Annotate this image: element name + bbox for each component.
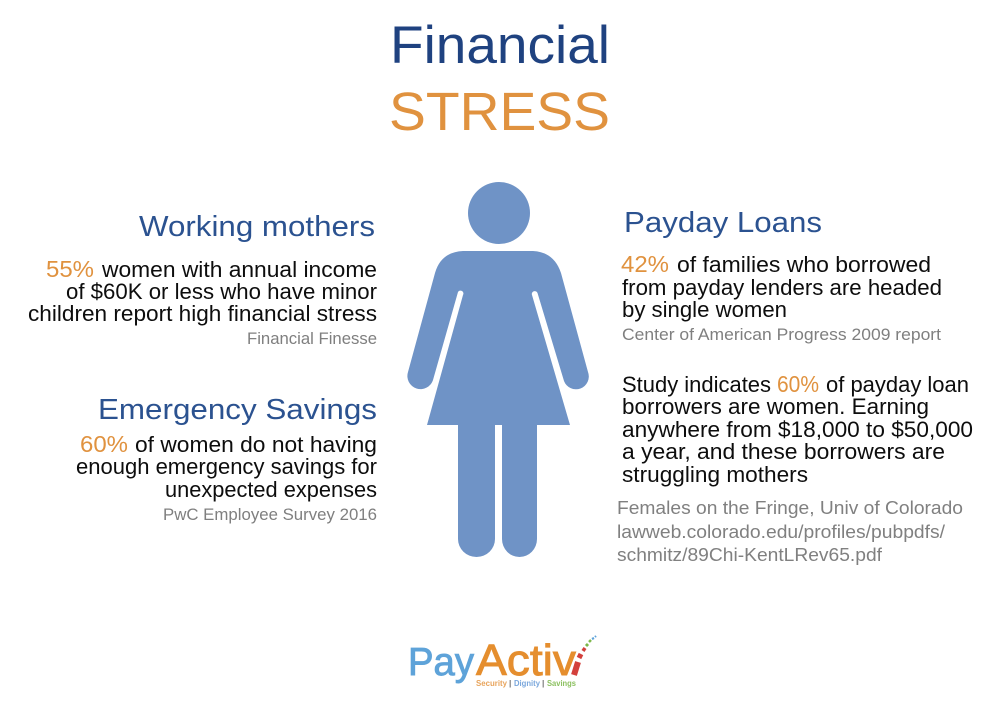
panel: emergency savings [76, 394, 377, 524]
tagline: | [509, 678, 511, 688]
panel: payday loans [617, 207, 973, 565]
text block: 42% statistic: of families who borrowed [677, 252, 931, 277]
text block: 60% of borrowers: anywhere from $18,000 to $50,000 [622, 417, 973, 442]
text block: 60% statistic [76, 431, 377, 502]
source: center of american progress: Center of American Progress 2009 report [622, 325, 941, 344]
text block: 55% statistic [28, 256, 377, 326]
logo: payactiv [408, 636, 596, 688]
logo: payactiv: Activ [476, 636, 576, 685]
heading: payday loans: Payday Loans [624, 207, 822, 239]
source: females on the fringe: lawweb.colorado.edu/profiles/pubpdfs/ [617, 521, 946, 542]
text block: 55% statistic: women with annual income [101, 257, 377, 282]
tagline [476, 678, 576, 688]
text block: 60% of borrowers: borrowers are women. Earning [622, 394, 929, 419]
source: females on the fringe [617, 497, 963, 565]
heading: emergency savings: Emergency Savings [98, 394, 377, 426]
source: females on the fringe: schmitz/89Chi-KentLRev65.pdf [617, 544, 883, 565]
text block: 42% statistic: from payday lenders are headed [622, 275, 942, 300]
text block: 60% statistic: 60% [80, 431, 128, 457]
text block: 60% statistic: of women do not having [135, 432, 377, 457]
text block: 42% statistic: 42% [621, 251, 669, 277]
text block: 60% of borrowers: struggling mothers [622, 462, 808, 487]
panel: working mothers [28, 211, 377, 348]
text block: 55% statistic: 55% [46, 256, 94, 282]
tagline: Security [476, 678, 507, 688]
text block: 42% statistic: by single women [622, 297, 787, 322]
text block: 60% of borrowers: Study indicates [622, 372, 771, 397]
tagline: | [542, 678, 544, 688]
source: pwc survey: PwC Employee Survey 2016 [163, 505, 377, 524]
text block: 60% statistic: enough emergency savings for [76, 454, 377, 479]
title: Financial [390, 16, 610, 75]
text block: 60% of borrowers: of payday loan [826, 372, 969, 397]
source: financial finesse: Financial Finesse [247, 329, 377, 348]
text block: 60% of borrowers [622, 371, 973, 487]
tagline: Savings [547, 678, 576, 688]
text block: 60% of borrowers: a year, and these borrowers are [622, 439, 945, 464]
text block: 42% statistic [621, 251, 942, 322]
heading: working mothers: Working mothers [139, 211, 375, 243]
source: females on the fringe: Females on the Fringe, Univ of Colorado [617, 497, 963, 518]
tagline: Dignity [514, 678, 540, 688]
logo: payactiv: Pay [408, 641, 474, 684]
title: STRESS [389, 82, 610, 142]
icon: woman figure [407, 182, 589, 557]
icon: check mark [574, 636, 596, 675]
text block: 60% statistic: unexpected expenses [165, 477, 377, 502]
text block: 55% statistic: children report high financial stress [28, 301, 377, 326]
title [389, 16, 610, 142]
text block: 55% statistic: of $60K or less who have minor [66, 279, 377, 304]
text block: 60% of borrowers: 60% [777, 371, 819, 397]
